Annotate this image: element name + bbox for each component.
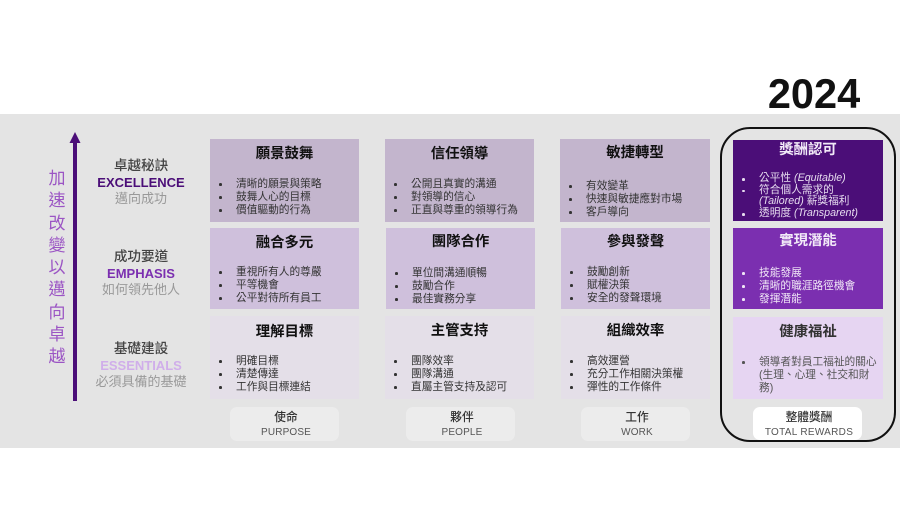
- vertical label: 變: [48, 236, 66, 255]
- panel: 願景鼓舞: [210, 139, 359, 222]
- panel: 信任領導: 正直與尊重的領導行為: [411, 204, 518, 216]
- column label: purpose: [230, 407, 339, 441]
- vertical label: 加: [48, 169, 66, 188]
- panel: 主管支持: 直屬主管支持及認可: [411, 381, 507, 393]
- vertical label: 以: [48, 258, 66, 277]
- panel: 健康福祉: (生理、心理、社交和財: [759, 369, 869, 381]
- panel: 健康福祉: [733, 317, 883, 399]
- row label: essentials: [95, 341, 186, 389]
- vertical label: [48, 169, 66, 366]
- row label: emphasis: EMPHASIS: [107, 266, 175, 281]
- panel: 參與發聲: 安全的發聲環境: [587, 292, 662, 304]
- panel: 信任領導: 公開且真實的溝通: [411, 178, 497, 190]
- panel: 願景鼓舞: 鼓舞人心的目標: [236, 191, 311, 203]
- panel: 融合多元: 重視所有人的尊嚴: [236, 266, 322, 278]
- panel: 融合多元: [210, 228, 359, 309]
- panel: 敏捷轉型: 客戶導向: [586, 206, 629, 218]
- row label: emphasis: 成功要道: [114, 249, 168, 264]
- column label: purpose: 使命: [274, 411, 298, 424]
- panel: 敏捷轉型: 有效變革: [586, 180, 629, 192]
- panel: 敏捷轉型: 敏捷轉型: [606, 145, 664, 161]
- panel: 獎酬認可: (Tailored) 薪獎福利: [759, 195, 849, 207]
- panel: 主管支持: 團隊效率: [411, 355, 454, 367]
- panel: 獎酬認可: 透明度 (Transparent): [759, 207, 858, 219]
- panel: 健康福祉: 務): [759, 382, 773, 394]
- column label: people: [406, 407, 515, 441]
- panel: 敏捷轉型: [560, 139, 710, 222]
- panel: 參與發聲: 鼓勵創新: [587, 266, 630, 278]
- panel: 團隊合作: [386, 228, 535, 309]
- column label: purpose: PURPOSE: [261, 427, 311, 438]
- panel: 實現潛能: 發揮潛能: [759, 293, 802, 305]
- column label: work: [581, 407, 690, 441]
- vertical label: 卓: [48, 325, 66, 344]
- panel: 健康福祉: 領導者對員工福祉的關心: [759, 356, 877, 368]
- panel: 理解目標: [210, 316, 359, 399]
- panel: 主管支持: 團隊溝通: [411, 368, 454, 380]
- column label: total rewards: [753, 407, 862, 440]
- panel: 主管支持: [385, 316, 534, 399]
- row label: essentials: ESSENTIALS: [100, 358, 182, 373]
- panel: 融合多元: 融合多元: [256, 235, 313, 251]
- panel: 願景鼓舞: 價值驅動的行為: [236, 204, 311, 216]
- panel: 實現潛能: 技能發展: [759, 267, 802, 279]
- panel: 理解目標: 清楚傳達: [236, 368, 279, 380]
- column label: work: 工作: [625, 411, 649, 424]
- panel: 主管支持: 主管支持: [431, 323, 488, 339]
- column label: work: WORK: [621, 427, 653, 438]
- highlight outline: total rewards: [720, 127, 896, 442]
- panel: 信任領導: 對領導的信心: [411, 191, 475, 203]
- panel: 參與發聲: 賦權決策: [587, 279, 630, 291]
- panel: 獎酬認可: 獎酬認可: [779, 142, 837, 158]
- row label: excellence: [97, 158, 185, 206]
- panel: 組織效率: 充分工作相關決策權: [587, 368, 683, 380]
- panel: 獎酬認可: [733, 140, 883, 221]
- panel: 團隊合作: 最佳實務分享: [412, 293, 476, 305]
- panel: 融合多元: 公平對待所有員工: [236, 292, 322, 304]
- panel: 組織效率: [561, 316, 710, 399]
- vertical label: 邁: [48, 280, 66, 299]
- panel: 願景鼓舞: 願景鼓舞: [256, 146, 313, 162]
- row label: excellence: EXCELLENCE: [97, 175, 185, 190]
- panel: 實現潛能: 清晰的職涯路徑機會: [759, 280, 855, 292]
- panel: 融合多元: 平等機會: [236, 279, 279, 291]
- vertical label: 改: [48, 214, 66, 232]
- row label: essentials: 基礎建設: [114, 341, 168, 356]
- panel: 敏捷轉型: 快速與敏捷應對市場: [586, 193, 682, 205]
- panel: 獎酬認可: 公平性 (Equitable): [759, 172, 846, 184]
- panel: 信任領導: 信任領導: [431, 146, 488, 162]
- column label: people: PEOPLE: [442, 427, 482, 438]
- year heading: 2024: [768, 70, 860, 117]
- panel: 組織效率: 組織效率: [607, 323, 664, 339]
- panel: 組織效率: 高效運營: [587, 355, 630, 367]
- panel: 團隊合作: 鼓勵合作: [412, 280, 455, 292]
- panel: 獎酬認可: 符合個人需求的: [759, 184, 834, 196]
- panel: 信任領導: [385, 139, 534, 222]
- panel: 團隊合作: 單位間溝通順暢: [412, 267, 487, 279]
- panel: 理解目標: 理解目標: [256, 324, 313, 340]
- column label: people: 夥伴: [450, 411, 474, 424]
- panel: 組織效率: 彈性的工作條件: [587, 381, 662, 393]
- column label: total rewards: 整體獎酬: [786, 411, 832, 424]
- panel: 健康福祉: 健康福祉: [779, 324, 837, 340]
- vertical label: 速: [48, 191, 66, 210]
- row label: excellence: 卓越秘訣: [114, 158, 168, 173]
- panel: 實現潛能: [733, 228, 883, 309]
- row label: excellence: 邁向成功: [115, 191, 167, 206]
- panel: 願景鼓舞: 清晰的願景與策略: [236, 178, 322, 190]
- background band: [0, 114, 900, 448]
- row label: essentials: 必須具備的基礎: [95, 374, 186, 389]
- panel: 參與發聲: [561, 228, 710, 309]
- panel: 參與發聲: 參與發聲: [607, 234, 664, 250]
- vertical label: 越: [48, 347, 66, 366]
- row label: emphasis: 如何領先他人: [102, 282, 180, 297]
- vertical label: 向: [48, 302, 66, 322]
- panel: 理解目標: 工作與目標連結: [236, 381, 311, 393]
- arrow: [70, 132, 80, 401]
- row label: emphasis: [102, 249, 180, 297]
- column label: total rewards: TOTAL REWARDS: [765, 427, 853, 438]
- panel: 理解目標: 明確目標: [236, 355, 279, 367]
- panel: 團隊合作: 團隊合作: [432, 234, 489, 250]
- panel: 實現潛能: 實現潛能: [779, 233, 837, 249]
